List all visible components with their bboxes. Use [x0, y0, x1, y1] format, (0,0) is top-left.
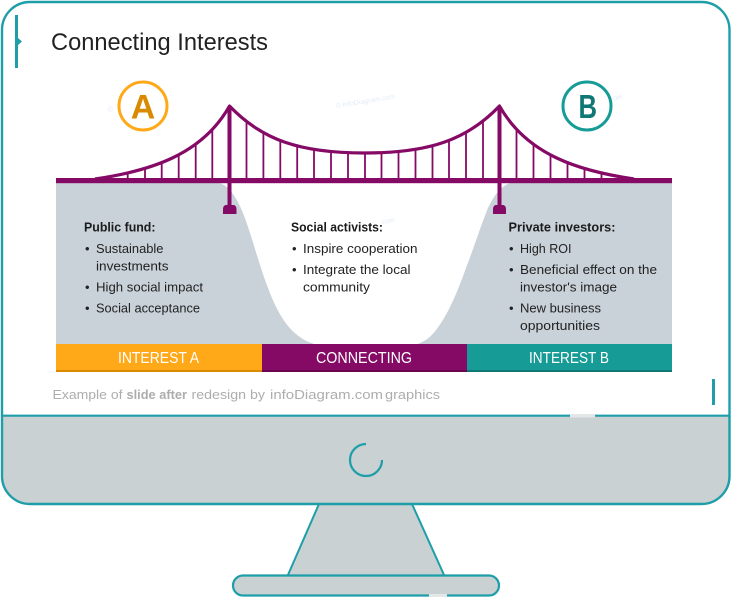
text block: social activists: [291, 220, 418, 294]
text block: public fund: High social impact: [96, 280, 203, 294]
footer caption: Example of: [52, 387, 123, 402]
icon: power ring: [350, 444, 382, 476]
text block: private investors: Private investors:: [508, 220, 616, 234]
text block: public fund: •: [85, 300, 90, 316]
text block: social activists: community: [303, 280, 371, 294]
badge A: [119, 82, 167, 130]
bar: interest A: INTEREST A: [118, 350, 200, 367]
bar: interest B: [467, 344, 672, 372]
left tower: [223, 104, 236, 214]
bar: interest A: [56, 344, 262, 372]
footer caption: slide after: [126, 387, 187, 402]
text block: public fund: investments: [96, 258, 169, 274]
text block: private investors: opportunities: [520, 318, 601, 333]
watermarks: com: [381, 217, 396, 226]
text block: social activists: Inspire cooperation: [303, 241, 418, 256]
text block: social activists: •: [292, 262, 297, 277]
bridge: [95, 106, 634, 180]
footer caption: [52, 387, 441, 402]
text block: private investors: •: [509, 241, 514, 256]
text block: social activists: Social activists:: [291, 220, 383, 234]
text block: social activists: Integrate the local: [303, 262, 411, 277]
text block: private investors: High ROI: [520, 241, 572, 256]
text block: private investors: Beneficial effect on the: [520, 262, 657, 277]
bridge hangers: [128, 122, 601, 180]
terrain: left and right hills: [56, 182, 672, 344]
text block: private investors: [508, 220, 657, 333]
text block: social activists: •: [292, 241, 297, 256]
title marker: [15, 15, 22, 68]
text block: private investors: New business: [520, 300, 601, 316]
text block: public fund: Sustainable: [96, 241, 164, 256]
bar: connecting: [262, 344, 467, 372]
footer caption: redesign by: [192, 387, 266, 402]
title: Connecting Interests: [51, 29, 268, 56]
footer caption: infoDiagram.com: [270, 387, 383, 402]
text block: private investors: •: [509, 300, 514, 316]
text block: public fund: Public fund:: [84, 220, 156, 234]
right tower: [493, 104, 506, 214]
text block: private investors: •: [509, 262, 514, 277]
badge B: [563, 82, 611, 130]
badge A: A: [131, 88, 155, 126]
text block: private investors: investor's image: [520, 280, 617, 294]
right screen marker: [712, 379, 715, 405]
bar: interest B: INTEREST B: [529, 350, 609, 367]
footer caption: graphics: [385, 387, 441, 402]
monitor base: [233, 576, 499, 597]
bridge cables: [95, 106, 634, 179]
text block: public fund: Social acceptance: [96, 300, 200, 316]
watermarks: [107, 93, 624, 226]
text block: public fund: •: [85, 241, 90, 256]
text block: public fund: •: [85, 280, 90, 294]
bar: connecting: CONNECTING: [316, 350, 412, 367]
text block: public fund: [84, 220, 203, 316]
badge B: B: [578, 88, 597, 125]
watermarks: © infoDiagram.com: [335, 93, 396, 110]
watermarks: ©: [107, 105, 114, 114]
watermarks: com: [609, 94, 624, 103]
bridge deck: [56, 178, 672, 183]
monitor stand: [288, 504, 444, 576]
